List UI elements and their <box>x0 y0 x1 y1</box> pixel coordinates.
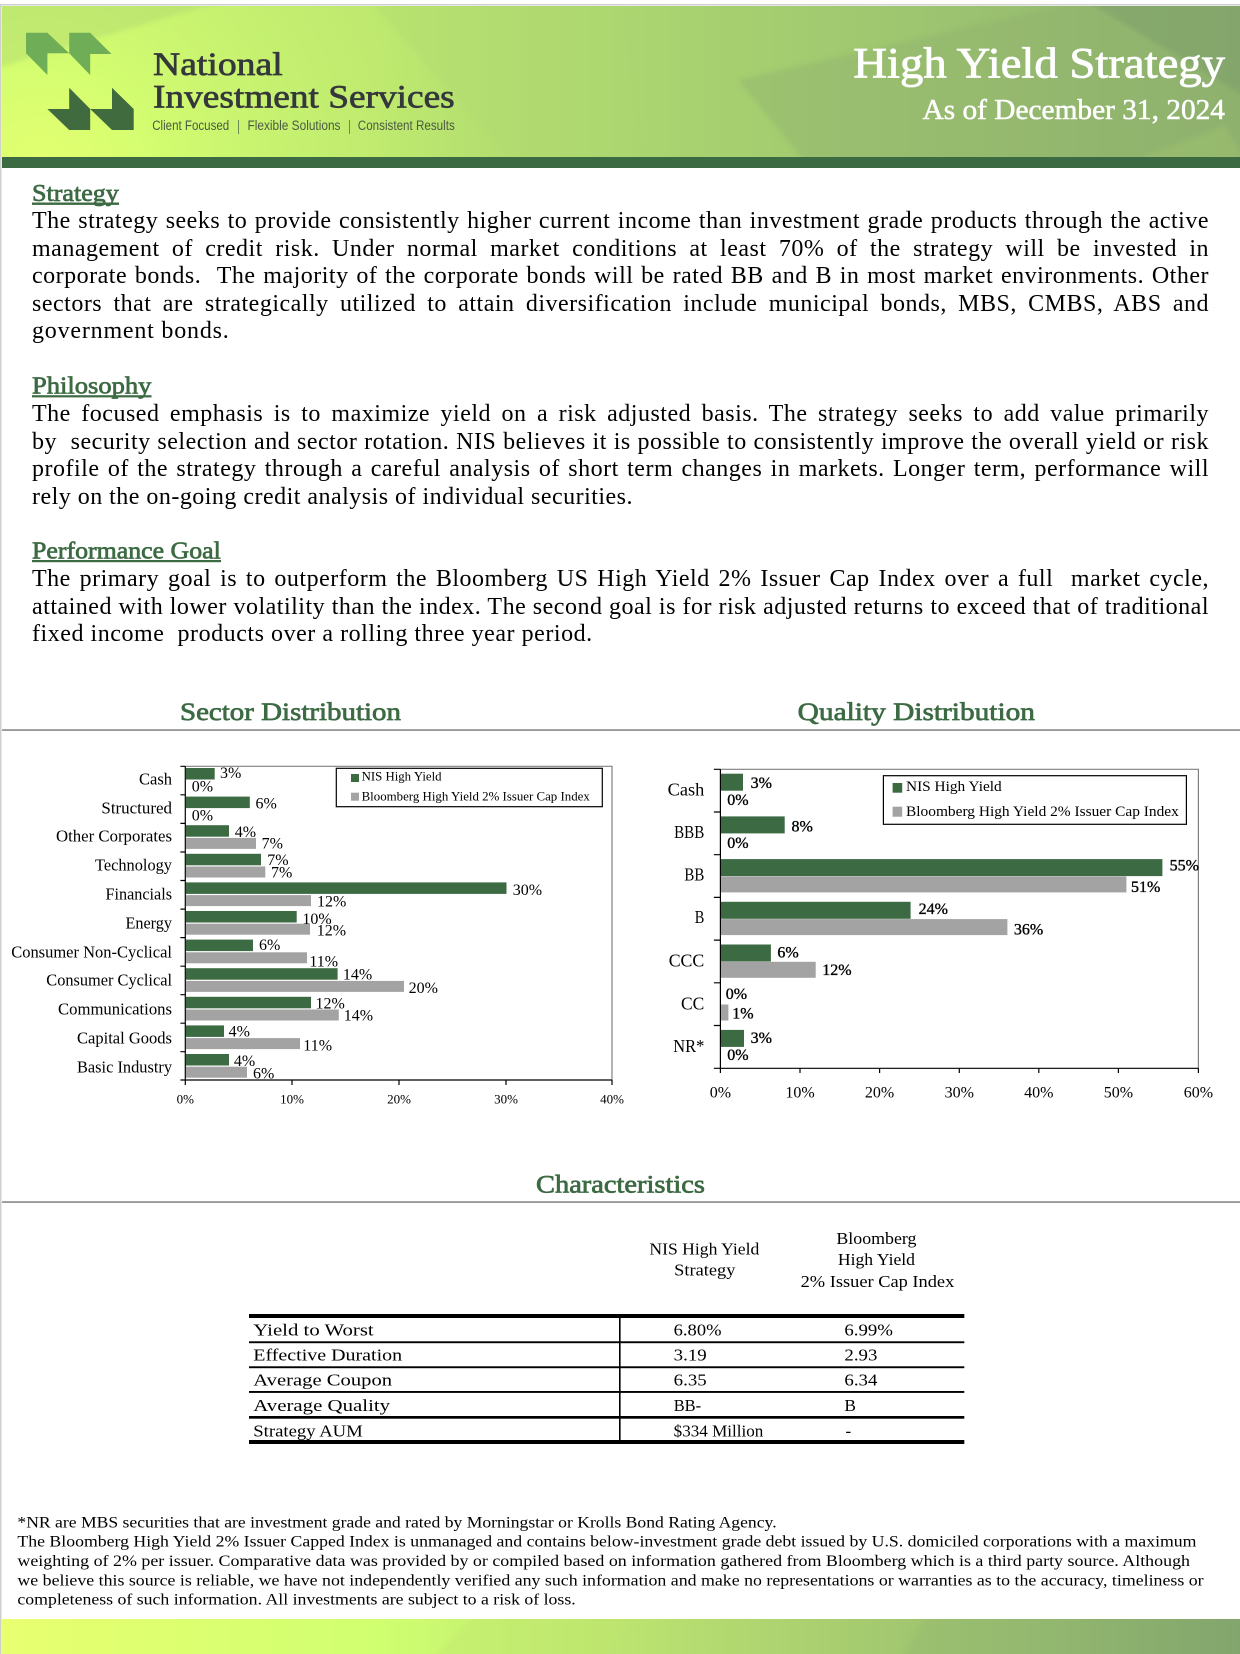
data labels: 0% <box>727 1047 749 1064</box>
dark green header bar <box>2 157 1240 168</box>
as-of date: As of December 31, 2024 <box>922 95 1225 126</box>
data labels: 3% <box>220 765 241 782</box>
heading: Characteristics: Characteristics <box>536 1172 705 1199</box>
data labels: 12% <box>316 995 345 1012</box>
column header: NIS High Yield Strategy: NIS High Yield <box>649 1239 760 1258</box>
row: Effective Duration: Effective Duration <box>253 1345 403 1364</box>
text block: philosophy: profile of the strategy through a careful analysis of short term changes in markets. Longer term, performance will <box>32 456 1209 482</box>
data labels: 7% <box>262 835 283 852</box>
row: Average Coupon: 6.34 <box>844 1371 878 1390</box>
category labels: Cash <box>139 769 173 788</box>
category labels <box>668 779 704 1056</box>
company name and tagline: National <box>153 47 283 83</box>
data labels: 55% <box>1170 857 1199 874</box>
data labels: 12% <box>317 923 346 940</box>
data labels <box>192 765 542 1082</box>
category labels: Cash <box>668 779 704 799</box>
data labels: 24% <box>919 901 948 918</box>
category labels: CC <box>681 993 704 1013</box>
category labels: Technology <box>95 856 173 875</box>
row: Effective Duration: 3.19 <box>674 1345 707 1364</box>
company name and tagline <box>152 47 455 134</box>
company name and tagline: Client Focused <box>152 118 229 133</box>
data labels: 51% <box>1131 879 1160 896</box>
text block: strategy: government bonds. <box>32 318 230 344</box>
category labels: B <box>695 907 704 927</box>
row: Strategy AUM: - <box>846 1421 852 1440</box>
title: High Yield Strategy <box>853 40 1226 87</box>
data labels: 0% <box>726 986 747 1003</box>
category labels: BB <box>684 864 704 884</box>
table: characteristics <box>249 1229 964 1444</box>
data labels: 30% <box>513 882 542 899</box>
category labels: Consumer Non-Cyclical <box>11 942 172 961</box>
legend: Bloomberg High Yield 2% Issuer Cap Index <box>362 789 590 804</box>
data labels: 3% <box>751 775 772 792</box>
text block: performance goal: attained with lower volatility than the index. The second goal is for risk adjusted returns to exceed that of traditional <box>32 594 1209 620</box>
text block: philosophy: The focused emphasis is to maximize yield on a risk adjusted basis. The strategy seeks to add value primarily <box>32 401 1209 427</box>
column header: NIS High Yield Strategy: Strategy <box>674 1260 736 1279</box>
row: Average Quality: Average Quality <box>253 1396 391 1415</box>
text block: strategy: sectors that are strategically utilized to attain diversification include municipal bonds, MBS, CMBS, ABS and <box>32 291 1209 317</box>
footnote: The Bloomberg High Yield 2% Issuer Capped Index is unmanaged and contains below-investment grade debt issued by U.S. domiciled corporations with a maximum <box>17 1534 1197 1551</box>
data labels: 0% <box>192 779 213 796</box>
data labels: 4% <box>234 1053 255 1070</box>
row: Effective Duration <box>253 1345 877 1364</box>
footnote: completeness of such information. All investments are subject to a risk of loss. <box>17 1591 576 1608</box>
text block: strategy: The strategy seeks to provide consistently higher current income than investment grade products through the active <box>32 208 1209 234</box>
logo mark <box>26 33 134 130</box>
row: Strategy AUM: $334 Million <box>674 1421 764 1440</box>
axis labels: 20% <box>865 1084 894 1101</box>
category labels: Communications <box>58 1000 172 1019</box>
column header: Bloomberg index: 2% Issuer Cap Index <box>801 1272 955 1291</box>
text block: philosophy: by security selection and sector rotation. NIS believes it is possible to consistently improve the overall yield or risk <box>32 429 1209 455</box>
category labels: Basic Industry <box>77 1057 173 1076</box>
row: Average Quality: B <box>844 1396 856 1415</box>
data labels: 6% <box>777 944 799 961</box>
bars: Bloomberg index <box>721 876 1126 1020</box>
row: Average Coupon: Average Coupon <box>253 1371 393 1390</box>
data labels: 6% <box>259 937 280 954</box>
row: Average Coupon: 6.35 <box>674 1371 707 1390</box>
axis labels: 10% <box>280 1092 304 1107</box>
heading: Quality Distribution: Quality Distribution <box>798 699 1036 726</box>
axis labels: 40% <box>1024 1084 1053 1101</box>
row: Effective Duration: 2.93 <box>844 1345 877 1364</box>
axis labels: 60% <box>1184 1084 1213 1101</box>
bars: NIS High Yield <box>186 768 506 1066</box>
data labels: 7% <box>267 852 289 869</box>
header banner <box>0 0 1240 170</box>
data labels: 0% <box>727 835 749 852</box>
category labels: Energy <box>126 913 173 932</box>
data labels: 6% <box>256 795 277 812</box>
data labels: 3% <box>751 1030 772 1047</box>
data labels: 7% <box>271 864 292 881</box>
data labels: 10% <box>302 911 332 928</box>
axis labels: 40% <box>600 1092 624 1107</box>
axis labels: 30% <box>945 1084 974 1101</box>
category labels: Capital Goods <box>77 1028 172 1047</box>
axis labels: 0% <box>710 1084 731 1101</box>
axis labels <box>710 1084 1213 1101</box>
category labels <box>11 769 173 1076</box>
category labels: Financials <box>106 884 172 903</box>
data labels: 8% <box>792 818 813 835</box>
data labels: 11% <box>309 953 338 970</box>
data labels: 12% <box>317 894 346 911</box>
chart: quality distribution <box>668 769 1213 1101</box>
legend: NIS High Yield <box>906 779 1002 795</box>
text block: strategy: management of credit risk. Under normal market conditions at least 70% of the strategy will be invested in <box>32 236 1209 262</box>
text block: strategy: corporate bonds. The majority of the corporate bonds will be rated BB and B in most market environments. Other <box>32 263 1209 289</box>
text block: performance goal <box>32 566 1209 647</box>
category labels: NR* <box>673 1036 704 1056</box>
text block: strategy <box>32 208 1209 344</box>
row: Yield to Worst: 6.80% <box>674 1320 722 1339</box>
heading: Strategy: Strategy <box>32 181 119 207</box>
text block: philosophy: rely on the on-going credit analysis of individual securities. <box>32 484 633 510</box>
data labels: 4% <box>235 824 256 841</box>
column header: Bloomberg index: High Yield <box>838 1250 916 1269</box>
category labels: CCC <box>669 950 704 970</box>
data labels: 0% <box>727 792 749 809</box>
category labels: Other Corporates <box>56 827 172 846</box>
legend <box>336 768 602 807</box>
legend: NIS High Yield <box>362 769 442 784</box>
data labels: 36% <box>1014 922 1043 939</box>
data labels: 20% <box>409 980 438 997</box>
row: Yield to Worst: Yield to Worst <box>253 1320 374 1339</box>
footer band <box>2 1619 1240 1654</box>
bars: NIS High Yield <box>721 774 1162 1047</box>
axis labels: 0% <box>177 1092 194 1107</box>
footnote: *NR are MBS securities that are investment grade and rated by Morningstar or Krolls Bond Rating Agency. <box>17 1514 777 1531</box>
data labels: 0% <box>192 807 213 824</box>
column header: Bloomberg index: Bloomberg <box>836 1229 917 1248</box>
axis labels: 20% <box>387 1092 411 1107</box>
heading: Performance Goal: Performance Goal <box>32 538 221 564</box>
data labels: 11% <box>303 1037 332 1054</box>
axis labels <box>177 1092 624 1107</box>
data labels: 6% <box>253 1065 274 1082</box>
axis labels: 50% <box>1104 1084 1133 1101</box>
data labels: 12% <box>822 962 852 979</box>
row: Strategy AUM <box>253 1421 852 1440</box>
category labels: Structured <box>101 798 173 817</box>
chart: sector distribution <box>11 765 624 1107</box>
category labels: BBB <box>674 822 704 842</box>
data labels: 14% <box>344 1007 373 1024</box>
legend: Bloomberg High Yield 2% Issuer Cap Index <box>906 804 1179 820</box>
row: Average Coupon <box>253 1371 878 1390</box>
table rules <box>249 1314 964 1444</box>
data labels: 14% <box>343 966 372 983</box>
company name and tagline: Investment Services <box>153 79 455 115</box>
row: Average Quality: BB- <box>674 1396 701 1415</box>
column header: Bloomberg index <box>801 1229 955 1291</box>
category labels: Consumer Cyclical <box>46 971 172 990</box>
row: Average Quality <box>253 1396 856 1415</box>
footnote <box>17 1514 1204 1608</box>
company name and tagline: Consistent Results <box>358 118 455 133</box>
data labels: 1% <box>732 1005 754 1022</box>
column header: NIS High Yield Strategy <box>649 1239 760 1279</box>
data labels: 4% <box>229 1023 250 1040</box>
text block: performance goal: The primary goal is to outperform the Bloomberg US High Yield 2% Issuer Cap Index over a full market cycle, <box>32 566 1209 592</box>
row: Yield to Worst: 6.99% <box>844 1320 893 1339</box>
company name and tagline: Flexible Solutions <box>248 118 341 133</box>
heading: Sector Distribution: Sector Distribution <box>180 699 402 726</box>
row: Strategy AUM: Strategy AUM <box>253 1421 363 1440</box>
data labels <box>726 775 1199 1064</box>
footnote: weighting of 2% per issuer. Comparative data was provided by or compiled based on information gathered from Bloomberg which is a third party source. Although <box>17 1553 1190 1570</box>
bars: Bloomberg index <box>186 838 404 1078</box>
text block: performance goal: fixed income products over a rolling three year period. <box>32 621 593 647</box>
row: Yield to Worst <box>253 1320 893 1339</box>
text block: philosophy <box>32 401 1209 510</box>
axis labels: 30% <box>494 1092 518 1107</box>
heading: Philosophy: Philosophy <box>32 373 151 399</box>
axis labels: 10% <box>785 1084 815 1101</box>
legend <box>883 776 1186 824</box>
footnote: we believe this source is reliable, we have not independently verified any such information and make no representations or warranties as to the accuracy, timeliness or <box>17 1572 1204 1589</box>
